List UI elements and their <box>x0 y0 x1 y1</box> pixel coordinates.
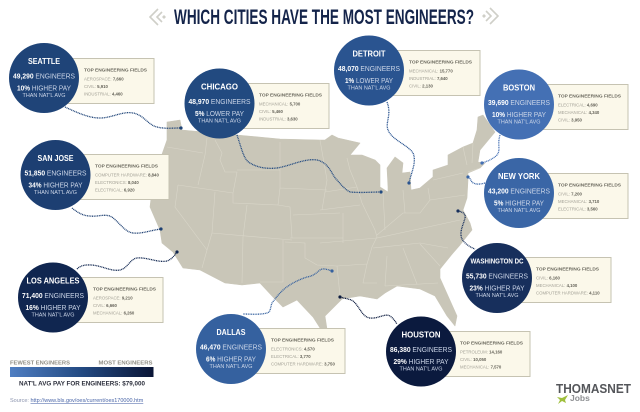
fields box: Seattle: INDUSTRIAL: 4,460 <box>84 92 123 96</box>
panel: Detroit <box>334 36 480 106</box>
circle: Boston: 39,690 ENGINEERS <box>488 98 550 107</box>
circle: San Jose <box>20 140 90 210</box>
route: Los Angeles <box>77 252 177 270</box>
national average pay: NAT'L AVG PAY FOR ENGINEERS: $79,000 <box>19 380 145 388</box>
fields box: New York: TOP ENGINEERING FIELDS <box>558 182 621 188</box>
fields box: Houston: TOP ENGINEERING FIELDS <box>460 340 523 346</box>
circle: Los Angeles: 71,400 ENGINEERS <box>22 291 84 300</box>
circle: Seattle: 10% HIGHER PAY <box>17 84 71 92</box>
fields box: Dallas <box>231 328 345 374</box>
circle: Detroit <box>334 36 404 106</box>
panel: New York <box>484 158 628 228</box>
fields box: Boston: CIVIL: 3,950 <box>558 118 583 122</box>
circle: Boston: 10% HIGHER PAY <box>492 110 546 119</box>
fields box: Dallas: COMPUTER HARDWARE: 3,750 <box>271 362 335 366</box>
map: United States <box>150 115 495 329</box>
fields box: San Jose <box>56 154 169 200</box>
fields box: Chicago: MECHANICAL: 5,700 <box>259 102 301 106</box>
fields box: Washington DC <box>497 258 611 302</box>
fields box: Los Angeles: MECHANICAL: 6,260 <box>93 310 135 316</box>
fields box: Dallas: TOP ENGINEERING FIELDS <box>271 338 334 342</box>
circle: Detroit: 48,070 ENGINEERS <box>338 64 400 73</box>
circle: Seattle: THAN NAT'L AVG <box>22 93 66 99</box>
circle: Chicago: 5% LOWER PAY <box>195 109 244 118</box>
fields box: New York: CIVIL: 7,200 <box>558 192 583 196</box>
fields box: Detroit <box>369 50 480 96</box>
circle: Houston <box>386 316 456 386</box>
fields box: Seattle: TOP ENGINEERING FIELDS <box>84 68 147 72</box>
circle: Dallas: THAN NAT'L AVG <box>210 364 252 370</box>
circle: Dallas: 6% HIGHER PAY <box>206 354 256 364</box>
route: Houston <box>340 297 397 324</box>
fields box: Chicago: TOP ENGINEERING FIELDS <box>259 92 322 98</box>
fields box: Washington DC: MECHANICAL: 4,100 <box>536 283 578 288</box>
circle: Dallas: DALLAS <box>216 327 246 337</box>
fields box: Los Angeles: TOP ENGINEERING FIELDS <box>93 286 156 292</box>
fields box: Detroit: INDUSTRIAL: 7,640 <box>409 76 448 81</box>
fields box: San Jose: COMPUTER HARDWARE: 8,840 <box>95 172 159 178</box>
fields box: Houston <box>421 332 530 376</box>
logo: ThomasNet Jobs: THOMASNET <box>556 382 631 396</box>
route: Boston <box>482 135 500 163</box>
fields box: Seattle <box>44 58 154 104</box>
fields box: Washington DC: TOP ENGINEERING FIELDS <box>536 266 599 272</box>
fields box: Los Angeles: CIVIL: 6,660 <box>93 303 118 308</box>
fields box: Detroit: CIVIL: 2,130 <box>409 84 434 88</box>
fields box: New York: ELECTRICAL: 3,560 <box>558 206 598 212</box>
circle: Detroit: THAN NAT'L AVG <box>348 86 390 92</box>
fields box: Boston <box>519 84 628 130</box>
fields box: Dallas: ELECTRONICS: 4,570 <box>271 346 315 352</box>
fields box: New York: MECHANICAL: 3,710 <box>558 199 600 204</box>
route: New York <box>468 177 485 184</box>
icon: title right chevrons <box>482 8 498 24</box>
fields box: Boston: TOP ENGINEERING FIELDS <box>558 94 621 98</box>
circle: Boston: THAN NAT'L AVG <box>498 120 540 126</box>
circle: New York <box>484 158 554 228</box>
circle: Dallas: 46,470 ENGINEERS <box>200 342 262 352</box>
fields box: Los Angeles <box>53 278 163 322</box>
circle: Chicago: CHICAGO <box>201 82 238 92</box>
circle: Seattle: SEATTLE <box>28 56 60 66</box>
fields box: Chicago: INDUSTRIAL: 3,630 <box>259 116 298 122</box>
fields box: San Jose: ELECTRONICS: 8,040 <box>95 180 139 185</box>
circle: New York: THAN NAT'L AVG <box>498 208 540 214</box>
icon: green logo mark <box>557 395 568 404</box>
circle: Houston: 29% HIGHER PAY <box>394 357 449 366</box>
circle: Boston <box>484 70 554 140</box>
fields box: San Jose: TOP ENGINEERING FIELDS <box>95 164 158 168</box>
city markers <box>159 126 484 299</box>
circle: Chicago: THAN NAT'L AVG <box>198 118 241 124</box>
logo: ThomasNet Jobs: Jobs <box>570 393 590 403</box>
fields box: Dallas: ELECTRICAL: 3,770 <box>271 354 311 359</box>
fields box: Houston: MECHANICAL: 7,570 <box>460 364 502 370</box>
circle: Houston: THAN NAT'L AVG <box>400 366 442 372</box>
legend label: most engineers: MOST ENGINEERS <box>98 360 153 366</box>
route: Chicago <box>237 135 381 192</box>
icon: title left chevrons <box>150 9 166 25</box>
fields box: Washington DC: COMPUTER HARDWARE: 4,110 <box>536 290 600 296</box>
circle: Seattle <box>9 43 79 113</box>
route: San Jose <box>72 208 161 233</box>
source line: Source: http://www.bls.gov/oes/current/oes170000.htm <box>10 398 144 404</box>
circle: Chicago <box>184 68 254 138</box>
circle: Washington DC: 55,730 ENGINEERS <box>466 272 528 280</box>
circle: New York: 5% HIGHER PAY <box>494 198 544 208</box>
circle: San Jose: 51,850 ENGINEERS <box>24 168 87 178</box>
fields box: Detroit: MECHANICAL: 15,770 <box>409 68 453 74</box>
circle: Detroit: DETROIT <box>352 48 386 58</box>
fields box: Houston: CIVIL: 10,050 <box>460 357 487 362</box>
logo: ThomasNet Jobs <box>556 382 631 404</box>
fields box: Seattle: CIVIL: 5,910 <box>84 84 109 89</box>
fields box: San Jose: ELECTRICAL: 6,920 <box>95 188 135 192</box>
circle: Washington DC: WASHINGTON DC <box>470 258 524 266</box>
route: Seattle <box>65 107 180 128</box>
circle: Los Angeles: 16% HIGHER PAY <box>26 303 81 312</box>
panel: Chicago <box>184 68 329 138</box>
fields box: Houston: PETROLEUM: 14,160 <box>460 350 503 354</box>
circle: Dallas <box>196 314 266 384</box>
circle: Washington DC: THAN NAT'L AVG <box>476 293 518 299</box>
circle: San Jose: 34% HIGHER PAY <box>28 180 83 190</box>
circle: Seattle: 49,290 ENGINEERS <box>13 72 75 80</box>
panel: Houston <box>386 316 530 386</box>
fields box: New York <box>519 174 628 218</box>
fields box: Seattle: AEROSPACE: 7,660 <box>84 76 124 82</box>
circle: Houston: HOUSTON <box>402 330 440 340</box>
panel: Washington DC <box>462 243 611 313</box>
fields box: Boston: ELECTRICAL: 4,690 <box>558 102 598 108</box>
circle: Washington DC: 23% HIGHER PAY <box>470 284 525 292</box>
legend <box>10 360 154 388</box>
circle: Chicago: 48,970 ENGINEERS <box>188 97 251 106</box>
fields box: Boston: MECHANICAL: 4,340 <box>558 110 600 115</box>
circle: Los Angeles: THAN NAT'L AVG <box>32 312 74 318</box>
fields box: Chicago <box>219 84 329 128</box>
route: Washington DC <box>458 211 475 249</box>
panel: Los Angeles <box>18 262 163 332</box>
circle: San Jose: SAN JOSE <box>38 153 74 163</box>
panel: San Jose <box>20 140 169 210</box>
fields box: Detroit: TOP ENGINEERING FIELDS <box>409 60 472 64</box>
legend gradient bar <box>10 367 154 377</box>
circle: Los Angeles: LOS ANGELES <box>26 276 80 286</box>
fields box: Washington DC: CIVIL: 6,160 <box>536 276 561 280</box>
circle: Detroit: 1% LOWER PAY <box>345 76 393 85</box>
panel: Boston <box>484 70 628 140</box>
legend label: fewest engineers: FEWEST ENGINEERS <box>10 360 70 366</box>
circle: Boston: BOSTON <box>503 82 535 92</box>
route: Detroit <box>387 102 414 183</box>
circle: New York: NEW YORK <box>498 171 541 181</box>
title: WHICH CITIES HAVE THE MOST ENGINEERS? <box>174 6 474 29</box>
circle: Washington DC <box>462 243 532 313</box>
fields box: Chicago: CIVIL: 5,460 <box>259 109 284 114</box>
fields box: Los Angeles: AEROSPACE: 9,210 <box>93 296 133 300</box>
circle: Los Angeles <box>18 262 88 332</box>
circle: Houston: 86,380 ENGINEERS <box>390 345 452 354</box>
circle: San Jose: THAN NAT'L AVG <box>34 190 77 196</box>
panel: Dallas <box>196 314 345 384</box>
panel: Seattle <box>9 43 154 113</box>
circle: New York: 43,200 ENGINEERS <box>488 186 550 196</box>
route: Dallas <box>243 269 332 314</box>
